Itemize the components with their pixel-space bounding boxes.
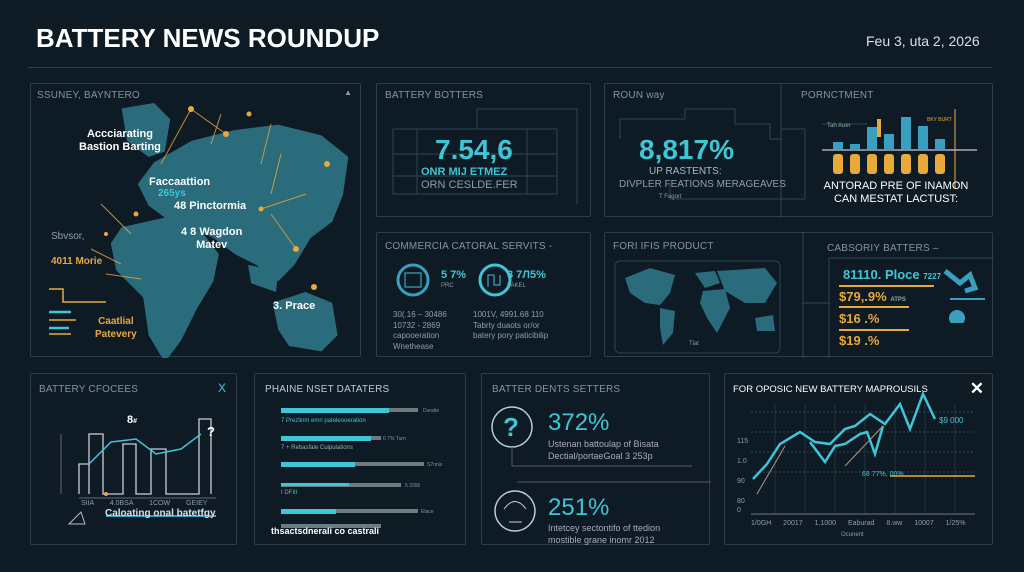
panel: battery chart: BATTERY CFOCEES [39,384,138,395]
panel: battery botters: 7.54,6 [435,134,513,165]
panel: line chart: 90 [737,478,745,485]
bar chart [822,109,977,189]
progress bars: 0 7% Turn [383,436,406,442]
panel: commercial: PAKEL [507,283,526,289]
panel: round way: ANTORAD PRE OF INAMON [824,180,968,192]
panel: product [604,232,993,357]
panel: bars: PHAINE NSET DATATERS [265,384,389,395]
panel: map: Matev [196,239,227,251]
panel: map: Patevery [95,329,137,340]
panel: percentages: Dectial/portaeGoal 3 253p [548,451,653,461]
panel: commercial: Wnethease [393,342,433,350]
panel: product: $79,.9% ATPS [839,289,906,304]
panel: bars: 7 + Rebasfale Cuipulations [281,445,353,451]
panel: line chart: 115 [737,438,748,445]
panel: round way: UP RASTENTS: [649,166,722,177]
panel: map: 3. Prace [273,300,315,312]
panel: product: Tiat [689,341,699,347]
icon: arrow and cloud [944,269,985,323]
panel: commercial: 10732 - 2869 [393,320,440,330]
map [49,103,348,358]
panel: line chart: FOR OPOSIC NEW BATTERY MAPROUSILS [733,384,928,395]
panel: percentages: BATTER DENTS SETTERS [492,384,620,395]
panel: line chart: 1/0GH 20017 1.1000 Eaburad 8.ww 10007 1/25% [751,520,966,527]
panel: map: Accciarating [87,128,153,140]
panel: line chart: 1.0 [737,458,747,465]
panel: battery chart: SIIA 4.0BSA 1COW GEIEY [81,500,207,507]
panel: map: Caatlial [98,316,134,327]
panel: commercial: capooeration [393,331,439,340]
progress bars: Duratie [423,408,439,414]
panel: map [30,83,361,357]
panel: line chart: $9 000 [939,416,963,425]
panel: line chart: ✕ [970,379,984,398]
panel: round way [604,83,993,217]
panel: battery chart: ? [207,424,215,439]
panel: battery chart: 8# [127,414,137,426]
panel: percentages: Ustenan battoulap of Bisata [548,439,659,449]
panel: percentages: Intetcey sectontifo of ttedion [548,523,660,533]
panel: commercial: Tabrty duaots or/or [473,320,540,330]
panel: line chart [724,373,993,545]
panel: round way: ROUN way [613,90,665,101]
panel: line chart: 80 [737,498,745,505]
panel: round way: 8,817% [639,134,734,165]
date: Feu 3, uta 2, 2026 [866,33,980,49]
panel: bars: I DFIII [281,490,297,496]
panel: commercial [376,232,591,357]
panel: map: 48 Pinctormia [174,200,246,212]
panel: map: 265ys [158,188,186,199]
panel: percentages: 251% [548,494,609,521]
bar chart: BKY BURT [927,117,952,123]
panel: commercial: batery pory paticibilip [473,331,548,340]
panel: battery botters [376,83,591,217]
bar chart: Tah Auer [827,123,851,129]
panel: map: Sbvsor, [51,231,84,242]
panel: commercial: 30(.16 – 30486 [393,310,447,319]
panel: percentages: mostible grane inomr 2012 [548,535,655,545]
panel: battery chart: Caloating onal batetfgy [105,508,216,519]
line chart [60,418,216,524]
panel: map: 4011 Morie [51,256,102,267]
panel: commercial: COMMERCIA CATORAL SERVITS - [385,241,552,252]
panel: product: CABSORIY BATTERS – [827,243,939,254]
panel: battery botters: ONR MIJ ETMEZ [421,166,507,178]
icons [396,264,512,296]
panel: line chart: Ocunent [841,532,864,538]
panel: percentages [481,373,710,545]
progress bars: Elace [421,509,434,515]
panel: map: Faccaattion [149,176,210,188]
progress bars: S7nnis [427,462,443,468]
panel: round way: DIVPLER FEATIONS MERAGEAVES [619,179,786,190]
world map [625,268,777,345]
panel: commercial: 1001V, 4991.68 110 [473,310,544,319]
title: BATTERY NEWS ROUNDUP [36,23,379,53]
progress bars: 5 3395 [405,483,421,489]
panel: round way: T Fagort [659,194,682,200]
panel: percentages: ? [503,412,519,442]
panel: commercial: 5 7% [441,269,466,281]
panel: commercial: 3 7Л5% [507,269,546,281]
panel: product: FORI IFIS PRODUCT [613,241,714,252]
panel: battery chart [30,373,237,545]
panel: map: 4 8 Wagdon [181,226,242,238]
progress bars [281,408,443,528]
panel: map: SSUNEY, BAYNTERO [37,90,140,101]
panel: bars: 7 Prezlinm emn pateleooeration [281,418,366,424]
panel: product: $16 .% [839,311,879,326]
panel: line chart: 68 77%, 00% [862,471,904,478]
panel: line chart: 0 [737,507,741,514]
panel: commercial: PRC [441,283,454,289]
panel: round way: CAN MESTAT LACTUST: [834,193,958,205]
panel: map: ▲ [344,88,352,97]
panel: bars [254,373,466,545]
panel: product: $19 .% [839,333,879,348]
panel: percentages: 372% [548,409,609,436]
panel: product: 81110. Ploce 7227 [843,267,941,282]
chart [751,390,975,514]
panel: battery botters: ORN CESLDE.FER [421,179,518,191]
panel: battery chart: X [218,381,226,395]
panel: battery botters: BATTERY BOTTERS [385,90,483,101]
panel: bars: thsactsdnerali co castrali [271,526,379,536]
panel: round way: PORNCTMENT [801,90,874,101]
panel: map: Bastion Barting [79,141,161,153]
